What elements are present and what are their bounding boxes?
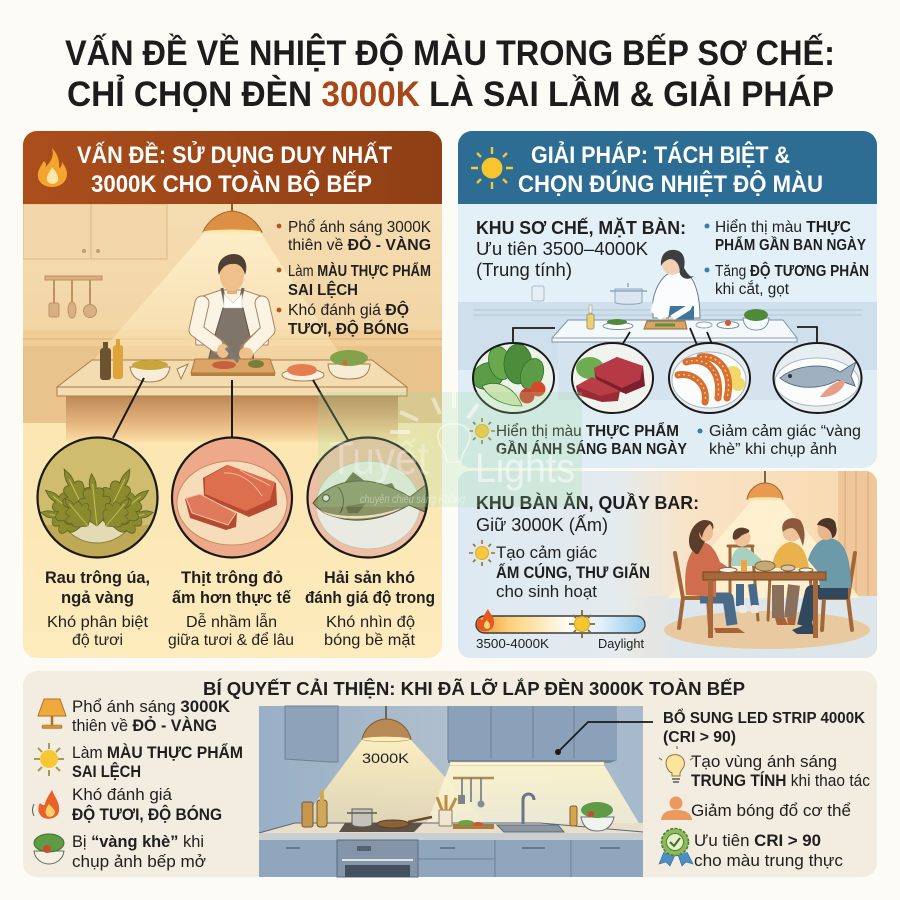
header: problem bbox=[23, 131, 442, 204]
counter objects bbox=[302, 778, 614, 832]
caption: vegetables: độ tươi bbox=[72, 632, 123, 649]
icon: lamp bbox=[38, 699, 66, 728]
problem bullets: Phổ ánh sáng 3000K bbox=[288, 219, 432, 236]
tip: colour shift: Làm MÀU THỰC PHẨM bbox=[72, 743, 243, 762]
caption: vegetables bbox=[45, 569, 150, 649]
caption: seafood: đánh giá độ trong bbox=[305, 589, 435, 607]
caption: meat: ấm hơn thực tế bbox=[172, 589, 292, 607]
panel: problem bbox=[23, 131, 442, 658]
icon: sun bbox=[34, 743, 64, 776]
header: solution: GIẢI PHÁP: TÁCH BIỆT & bbox=[531, 140, 790, 169]
tip: freshness: Khó đánh giá bbox=[72, 786, 173, 804]
title bbox=[65, 33, 835, 114]
tip: warm spectrum: thiên về ĐỎ - VÀNG bbox=[72, 716, 217, 735]
problem bullets: Khó đánh giá ĐỘ bbox=[288, 301, 409, 319]
vignette: greens bbox=[469, 343, 555, 413]
tips heading: BÍ QUYẾT CẢI THIỆN: KHI ĐÃ LỠ LẮP ĐÈN 3000K TOÀN BẾP bbox=[203, 678, 745, 699]
header: problem: VẤN ĐỀ: SỬ DỤNG DUY NHẤT bbox=[77, 140, 392, 169]
dining benefit: Tạo cảm giác bbox=[496, 544, 597, 562]
person: boy bbox=[731, 528, 762, 613]
person: man bbox=[792, 518, 851, 634]
caption: meat: Dễ nhầm lẫn bbox=[186, 612, 277, 631]
prep kitchen scene bbox=[458, 250, 877, 468]
prep zone heading: (Trung tính) bbox=[476, 259, 572, 280]
tip: reduce shadow: Giảm bóng đổ cơ thể bbox=[691, 802, 851, 820]
prep counter bbox=[552, 305, 797, 342]
caption: vegetables: Rau trông úa, bbox=[45, 569, 150, 587]
prep benefit left: GẦN ÁNH SÁNG BAN NGÀY bbox=[496, 441, 688, 458]
caption: seafood: Khó nhìn độ bbox=[326, 614, 415, 631]
title: CHỈ CHỌN ĐÈN 3000K LÀ SAI LẦM & GIẢI PHÁP bbox=[67, 74, 834, 114]
header: solution: CHỌN ĐÚNG NHIỆT ĐỘ MÀU bbox=[518, 170, 823, 198]
problem bullets: SAI LỆCH bbox=[288, 281, 358, 299]
connector lines bbox=[113, 378, 348, 440]
dining heading bbox=[476, 492, 699, 535]
prep cook bbox=[653, 250, 700, 322]
tip: warm spectrum bbox=[38, 698, 230, 735]
family at table bbox=[675, 518, 855, 638]
icon: salad bowl bbox=[34, 834, 64, 864]
watermark: Lights bbox=[475, 444, 575, 491]
tip: photo cast: Bị “vàng khè” khi bbox=[72, 833, 204, 851]
watermark bbox=[318, 392, 582, 507]
icon: flame bbox=[38, 148, 67, 187]
title: VẤN ĐỀ VỀ NHIỆT ĐỘ MÀU TRONG BẾP SƠ CHẾ: bbox=[65, 33, 835, 73]
tip: photo cast bbox=[34, 833, 206, 871]
tip: warm spectrum: Phổ ánh sáng 3000K bbox=[72, 698, 230, 716]
prep benefit right bbox=[698, 423, 861, 458]
prep benefit right: Giảm cảm giác “vàng bbox=[709, 423, 861, 440]
counter and base cabinets bbox=[259, 823, 643, 877]
problem bullets: thiên về ĐỎ - VÀNG bbox=[288, 236, 431, 254]
utensil rail bbox=[45, 276, 102, 318]
colour temperature scale bbox=[476, 609, 645, 651]
circle: meat bbox=[171, 437, 293, 559]
prep zone bullets: Tăng ĐỘ TƯƠNG PHẢN bbox=[715, 262, 869, 280]
prep zone heading bbox=[476, 217, 686, 280]
tip: CRI priority: Ưu tiên CRI > 90 bbox=[694, 832, 821, 850]
caption: seafood: bóng bề mặt bbox=[324, 632, 416, 649]
caption: seafood: Hải sản khó bbox=[324, 569, 415, 587]
tip: freshness bbox=[32, 786, 222, 824]
person: woman left bbox=[685, 520, 745, 633]
dining heading: KHU BÀN ĂN, QUẦY BAR: bbox=[476, 492, 699, 513]
caption: meat: giữa tươi & để lâu bbox=[168, 631, 294, 649]
tip: freshness: ĐỘ TƯƠI, ĐỘ BÓNG bbox=[72, 805, 222, 824]
panel: solution bbox=[458, 131, 877, 468]
counter bbox=[57, 339, 407, 442]
caption: meat: Thịt trông đỏ bbox=[181, 569, 283, 587]
prep zone bullets bbox=[704, 219, 869, 298]
colour temperature scale: 3500-4000K bbox=[476, 637, 550, 651]
curtain bbox=[838, 471, 877, 596]
prep zone bullets: khi cắt, gọt bbox=[715, 281, 790, 298]
upper cabinets bbox=[285, 706, 617, 763]
callout line bbox=[555, 722, 653, 755]
prep zone heading: Ưu tiên 3500–4000K bbox=[476, 238, 649, 259]
tip: colour shift: SAI LỆCH bbox=[72, 762, 141, 781]
tip: reduce shadow bbox=[661, 796, 851, 820]
tip: neutral zone bbox=[659, 746, 870, 790]
chef bbox=[195, 254, 269, 362]
prep zone heading: KHU SƠ CHẾ, MẶT BÀN: bbox=[476, 217, 686, 238]
circle: wilted greens bbox=[36, 437, 158, 558]
icon: scale flame bbox=[476, 609, 494, 631]
connector lines bbox=[513, 327, 817, 345]
dining benefit: cho sinh hoạt bbox=[496, 583, 597, 601]
kitchen illustration bbox=[259, 706, 643, 877]
tip: neutral zone: TRUNG TÍNH khi thao tác bbox=[691, 771, 870, 790]
pendant lamp bbox=[203, 204, 262, 234]
LED strip recommendation: BỔ SUNG LED STRIP 4000K bbox=[663, 708, 865, 727]
colour temperature scale: Daylight bbox=[598, 637, 645, 651]
icon: small sun bbox=[469, 418, 495, 444]
watermark: Tuyết bbox=[329, 432, 429, 484]
icon: bulb bbox=[659, 746, 693, 782]
panel: dining zone bbox=[458, 471, 877, 658]
tip: neutral zone: Tạo vùng ánh sáng bbox=[691, 753, 837, 771]
person: woman right bbox=[772, 518, 809, 625]
dining table bbox=[703, 560, 826, 638]
circle: fish bbox=[307, 437, 428, 558]
panel: improvement tips bbox=[23, 671, 877, 877]
caption: seafood bbox=[305, 569, 435, 649]
vignette: fish bbox=[773, 343, 863, 413]
icon: small sun bbox=[469, 540, 495, 566]
icon: sun bbox=[471, 147, 513, 189]
prep benefit left bbox=[496, 422, 687, 454]
caption: vegetables: ngả vàng bbox=[61, 589, 134, 607]
icon: person bbox=[661, 796, 692, 820]
neutral strip light bbox=[424, 765, 643, 830]
LED strip recommendation: (CRI > 90) bbox=[663, 729, 736, 746]
icon: badge bbox=[659, 828, 693, 866]
dining heading: Giữ 3000K (Ấm) bbox=[476, 514, 608, 535]
header: solution bbox=[458, 131, 877, 204]
dining lamp bbox=[747, 471, 783, 501]
tip: photo cast: chụp ảnh bếp mở bbox=[72, 853, 206, 871]
tip: CRI priority bbox=[659, 828, 843, 870]
kitchen illustration: 3000K bbox=[362, 750, 410, 766]
caption: vegetables: Khó phân biệt bbox=[47, 614, 149, 631]
problem bullets: Làm MÀU THỰC PHẨM bbox=[288, 262, 431, 280]
icon: scale sun bbox=[569, 610, 595, 638]
vignette: shrimp bbox=[669, 343, 751, 413]
icon: flame bbox=[32, 790, 59, 819]
problem bullets bbox=[277, 219, 432, 338]
kitchen scene bbox=[23, 204, 442, 442]
prep benefit left: Hiển thị màu THỰC PHẨM bbox=[496, 422, 679, 440]
warm beam bbox=[298, 740, 490, 826]
caption: meat bbox=[168, 569, 294, 649]
header: problem: 3000K CHO TOÀN BỘ BẾP bbox=[91, 170, 372, 198]
dining benefit bbox=[496, 544, 650, 601]
LED strip recommendation bbox=[663, 708, 865, 746]
chairs bbox=[675, 546, 855, 630]
prep benefit right: khè” khi chụp ảnh bbox=[709, 441, 837, 458]
vignette: beef bbox=[572, 343, 654, 413]
watermark: chuyên chiếu sáng Không bbox=[360, 492, 465, 506]
tip: CRI priority: cho màu trung thực bbox=[694, 852, 843, 870]
prep zone bullets: Hiển thị màu THỰC bbox=[715, 219, 851, 236]
tip: colour shift bbox=[34, 743, 243, 781]
prep zone bullets: PHẨM GẦN BAN NGÀY bbox=[715, 236, 867, 254]
pendant lamp bbox=[362, 706, 411, 742]
problem bullets: TƯƠI, ĐỘ BÓNG bbox=[288, 320, 409, 338]
dining benefit: ẤM CÚNG, THƯ GIÃN bbox=[496, 562, 650, 582]
